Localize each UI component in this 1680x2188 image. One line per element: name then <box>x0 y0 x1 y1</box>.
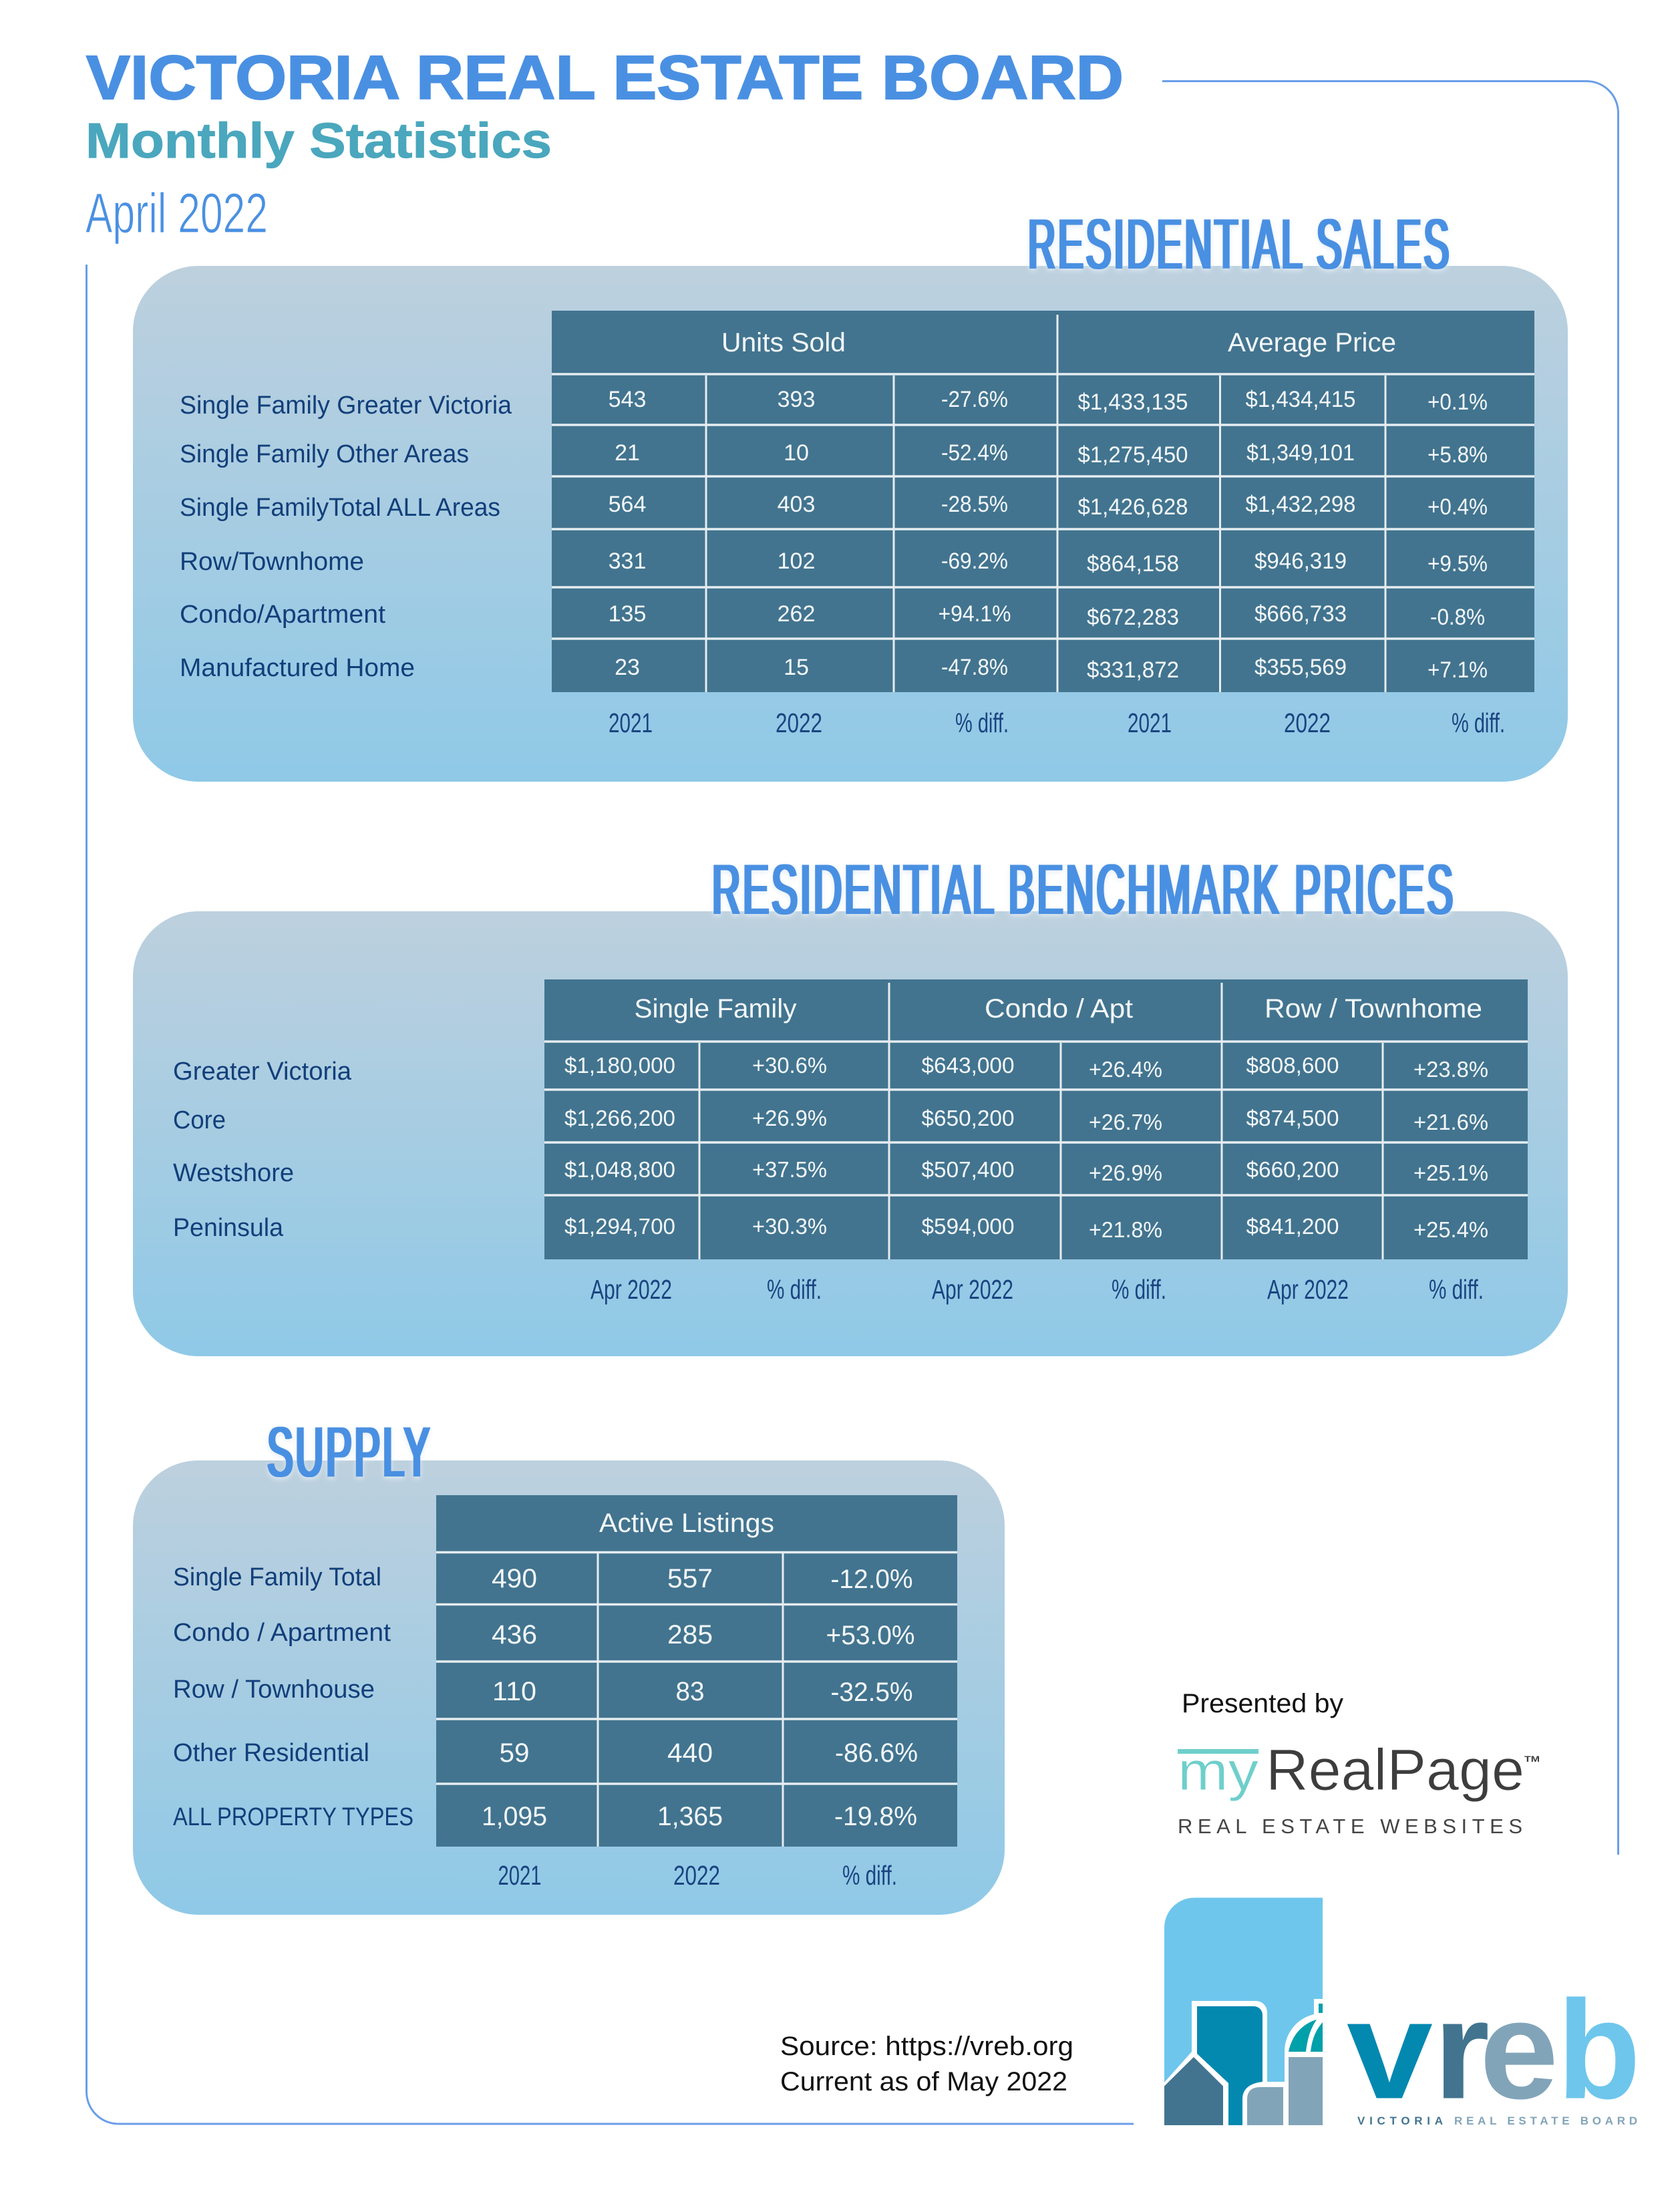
average price values: $1,433,135 <box>1078 389 1188 415</box>
average price values: +7.1% <box>1427 657 1488 683</box>
column footers: % diff. <box>767 1274 822 1305</box>
supply values: 436 <box>492 1620 537 1650</box>
average price values: $355,569 <box>1254 655 1347 680</box>
row townhome values: $874,500 <box>1246 1106 1339 1130</box>
supply values <box>482 1564 918 1831</box>
units sold values: 543 <box>609 387 646 412</box>
row labels: Other Residential <box>173 1739 369 1767</box>
single family values: +26.9% <box>752 1106 827 1130</box>
average price values: $1,275,450 <box>1078 442 1188 468</box>
supply values: -86.6% <box>835 1738 918 1768</box>
supply values: 1,365 <box>657 1802 723 1831</box>
source note: Source: https://vreb.org <box>780 2032 1073 2061</box>
column footers <box>498 1860 897 1891</box>
column footers: 2022 <box>673 1860 720 1891</box>
condo values: $643,000 <box>922 1053 1014 1078</box>
row labels: Core <box>173 1106 226 1134</box>
table: benchmark grid <box>544 979 1528 1259</box>
supply values: +53.0% <box>826 1621 915 1650</box>
column footers: % diff. <box>955 708 1009 738</box>
title: VICTORIA REAL ESTATE BOARD <box>86 43 1124 112</box>
units sold values: 393 <box>778 387 815 412</box>
column footers: Apr 2022 <box>1267 1274 1349 1305</box>
frame line: top right <box>1162 82 1618 1855</box>
condo values <box>922 1053 1162 1242</box>
logo: myRealPage: RealPage <box>1266 1738 1524 1803</box>
logo wordmark <box>1347 1971 1641 2129</box>
row townhome values: $808,600 <box>1246 1053 1339 1078</box>
average price values <box>1078 387 1488 683</box>
supply values: -12.0% <box>831 1565 912 1594</box>
single family values: +30.6% <box>752 1053 827 1078</box>
column footers: 2021 <box>1128 708 1172 738</box>
supply values: -32.5% <box>831 1678 912 1707</box>
column footers: 2022 <box>1284 708 1331 738</box>
average price values: $666,733 <box>1254 601 1347 627</box>
panel background <box>133 911 1568 1356</box>
column footers: 2021 <box>609 708 653 738</box>
table headers: Condo / Apt <box>985 994 1133 1024</box>
row townhome values: +25.4% <box>1413 1217 1488 1242</box>
row labels: Single Family Greater Victoria <box>180 392 512 420</box>
supply values: 285 <box>667 1620 713 1650</box>
frame line: bottom left <box>87 265 1134 2124</box>
table: sales grid <box>552 311 1534 692</box>
table headers: Units Sold <box>721 328 846 357</box>
row townhome values: $841,200 <box>1246 1214 1339 1239</box>
row labels: Condo / Apartment <box>173 1619 391 1647</box>
logo wordmark: b <box>1557 1971 1641 2129</box>
table: supply grid <box>436 1495 957 1847</box>
units sold values: 23 <box>615 655 640 680</box>
column footers <box>591 1274 1484 1305</box>
row townhome values <box>1246 1053 1488 1242</box>
condo values: $594,000 <box>922 1214 1014 1239</box>
units sold values: 262 <box>778 601 815 627</box>
units sold values: 564 <box>609 492 646 517</box>
average price values: $331,872 <box>1087 657 1179 683</box>
row labels: Manufactured Home <box>180 654 415 682</box>
single family values: +37.5% <box>752 1157 827 1182</box>
single family values: $1,180,000 <box>564 1053 675 1078</box>
row labels: ALL PROPERTY TYPES <box>173 1803 413 1831</box>
row labels <box>173 1058 352 1242</box>
source note: Current as of May 2022 <box>780 2067 1067 2096</box>
row labels: Row/Townhome <box>180 548 364 576</box>
logo tagline: REAL ESTATE BOARD <box>1454 2115 1637 2127</box>
table headers <box>635 994 1482 1024</box>
subtitle: Monthly Statistics <box>86 113 552 168</box>
units sold values: 331 <box>609 549 646 574</box>
logo tagline: VICTORIA <box>1357 2115 1443 2127</box>
logo: VREB <box>1164 1897 1641 2129</box>
logo wordmark: r <box>1434 1971 1490 2129</box>
units sold values <box>609 387 1011 680</box>
average price values: $1,426,628 <box>1078 494 1188 520</box>
logo: myRealPage <box>1178 1738 1540 1838</box>
row townhome values: $660,200 <box>1246 1157 1339 1182</box>
units sold values: -47.8% <box>941 655 1008 680</box>
heading: supply: SUPPLY <box>267 1412 432 1492</box>
panel: residential sales <box>133 204 1568 782</box>
row labels: Condo/Apartment <box>180 601 385 629</box>
units sold values: 15 <box>784 655 809 680</box>
table headers: Single Family <box>635 994 796 1024</box>
supply values: 59 <box>500 1738 529 1768</box>
single family values: +30.3% <box>752 1214 827 1239</box>
panel background <box>133 266 1568 782</box>
units sold values: -52.4% <box>941 440 1008 466</box>
average price values: $864,158 <box>1087 551 1179 577</box>
units sold values: -69.2% <box>941 549 1008 574</box>
panel: supply <box>133 1412 1005 1915</box>
condo values: +21.8% <box>1089 1217 1162 1242</box>
condo values: +26.4% <box>1089 1057 1162 1082</box>
single family values: $1,048,800 <box>564 1157 675 1182</box>
average price values: $1,434,415 <box>1245 387 1356 412</box>
column footers: % diff. <box>842 1860 897 1891</box>
row townhome values: +25.1% <box>1413 1160 1488 1185</box>
average price values: $1,349,101 <box>1246 440 1355 466</box>
logo tagline <box>1357 2115 1637 2127</box>
units sold values: 10 <box>784 440 809 466</box>
average price values: +0.4% <box>1427 494 1488 520</box>
column footers: 2022 <box>776 708 822 738</box>
date: April 2022 <box>86 182 268 245</box>
supply values: -19.8% <box>834 1802 917 1831</box>
units sold values: +94.1% <box>938 601 1011 627</box>
column footers: 2021 <box>498 1860 541 1891</box>
column footers: % diff. <box>1429 1274 1484 1305</box>
units sold values: 102 <box>778 549 815 574</box>
logo wordmark: v <box>1347 1971 1433 2129</box>
table headers <box>721 328 1396 357</box>
logo: myRealPage: TM <box>1524 1754 1540 1764</box>
column footers <box>609 708 1505 738</box>
logo: myRealPage: my <box>1178 1741 1258 1802</box>
column footers: % diff. <box>1452 708 1505 738</box>
average price values: $946,319 <box>1254 549 1347 574</box>
single family values: $1,266,200 <box>564 1106 675 1130</box>
table header: Active Listings <box>599 1509 774 1538</box>
logo icon: skyline <box>1164 1897 1323 2125</box>
panel background <box>133 1460 1005 1915</box>
units sold values: -27.6% <box>941 387 1008 412</box>
table headers: Row / Townhome <box>1265 994 1482 1024</box>
table headers: Average Price <box>1228 328 1396 357</box>
condo values: +26.9% <box>1089 1160 1162 1185</box>
column footers: Apr 2022 <box>932 1274 1013 1305</box>
condo values: +26.7% <box>1089 1110 1162 1134</box>
logo wordmark: e <box>1480 1971 1558 2129</box>
supply values: 1,095 <box>482 1802 547 1831</box>
row townhome values: +23.8% <box>1413 1057 1488 1082</box>
supply values: 440 <box>667 1738 713 1768</box>
panel: residential benchmark prices <box>133 849 1568 1356</box>
row labels: Peninsula <box>173 1214 284 1242</box>
average price values: +5.8% <box>1427 442 1488 468</box>
supply values: 110 <box>492 1677 536 1706</box>
logo: myRealPage: REAL ESTATE WEBSITES <box>1178 1815 1522 1838</box>
column footers: Apr 2022 <box>591 1274 672 1305</box>
row labels: Single Family Other Areas <box>180 440 469 468</box>
units sold values: 135 <box>609 601 646 627</box>
average price values: +9.5% <box>1427 551 1488 577</box>
supply values: 557 <box>667 1564 713 1593</box>
condo values: $507,400 <box>922 1157 1014 1182</box>
units sold values: 403 <box>778 492 815 517</box>
row labels: Greater Victoria <box>173 1058 352 1086</box>
units sold values: 21 <box>615 440 640 466</box>
supply values: 490 <box>492 1564 537 1593</box>
row labels: Row / Townhouse <box>173 1676 375 1704</box>
average price values: $672,283 <box>1087 605 1179 630</box>
row labels <box>180 392 512 682</box>
single family values <box>564 1053 827 1239</box>
row labels <box>173 1563 413 1831</box>
row labels: Single FamilyTotal ALL Areas <box>180 494 500 522</box>
row labels: Single Family Total <box>173 1563 381 1591</box>
average price values: +0.1% <box>1427 389 1488 415</box>
average price values: -0.8% <box>1430 605 1485 630</box>
row townhome values: +21.6% <box>1413 1110 1488 1134</box>
row labels: Westshore <box>173 1159 294 1187</box>
column footers: % diff. <box>1112 1274 1166 1305</box>
condo values: $650,200 <box>922 1106 1014 1130</box>
source note <box>780 2032 1073 2096</box>
presented by label: Presented by <box>1182 1689 1343 1718</box>
supply values: 83 <box>676 1677 704 1706</box>
average price values: $1,432,298 <box>1245 492 1356 517</box>
units sold values: -28.5% <box>941 492 1008 517</box>
single family values: $1,294,700 <box>564 1214 675 1239</box>
